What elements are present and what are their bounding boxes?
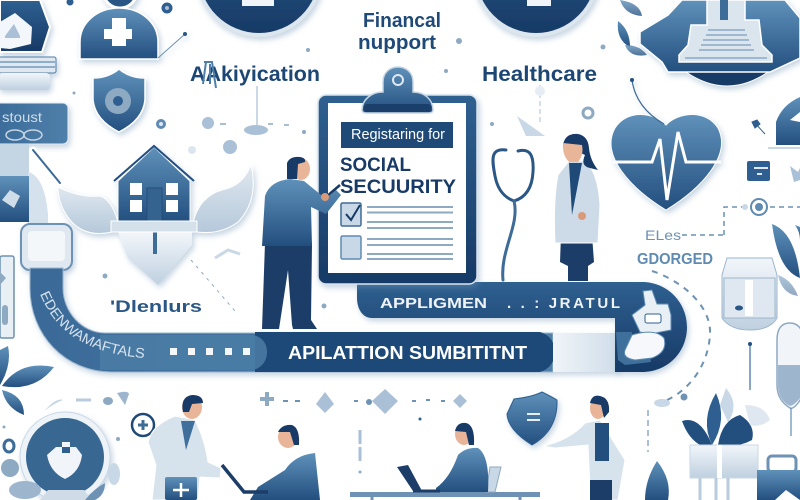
heading: financial support: Financal <box>363 10 441 32</box>
icon: connector blob <box>648 394 688 452</box>
band curved caption: EDENWAMAFTALS <box>40 290 144 358</box>
band squares <box>170 348 250 355</box>
icon: leaves near monument <box>618 0 647 56</box>
shield below house <box>118 232 192 285</box>
icon: house badge top left <box>0 0 56 90</box>
progress band: upper with end cap: . . : JRATUL <box>507 295 620 312</box>
body <box>436 448 488 492</box>
legs <box>262 243 317 329</box>
paper <box>328 103 466 273</box>
icon: circle badge bottom left <box>20 412 110 500</box>
label: gdorged: GDORGED <box>637 251 713 268</box>
icon: nurse bust with cross <box>80 0 187 59</box>
decorative sparks upper middle <box>188 86 289 154</box>
icon: shield held by doctor <box>507 392 557 445</box>
icon: bottom leaf <box>645 461 669 500</box>
icon: potted plant <box>682 388 770 500</box>
laptop <box>397 465 422 491</box>
laptop <box>222 465 268 492</box>
clipboard board <box>318 95 477 284</box>
table <box>350 492 540 497</box>
medical case <box>165 477 197 500</box>
label sign left <box>0 103 68 144</box>
head <box>455 423 473 445</box>
icon: monument in top-right badge <box>640 0 800 86</box>
clipboard: registering for social security: SECUURITY <box>340 177 456 198</box>
clip <box>362 67 433 113</box>
right wing <box>193 165 253 233</box>
icon: stethoscope <box>493 150 533 280</box>
coat <box>554 161 600 243</box>
figure: female doctor <box>554 134 600 281</box>
icon: jar <box>722 258 777 390</box>
form lines <box>367 207 453 259</box>
skirt and legs <box>560 235 594 281</box>
icon: briefcase <box>757 456 800 500</box>
decorative cross and dash bottom <box>260 392 300 406</box>
progress band: upper with end cap: APPLIGMEN <box>380 295 487 312</box>
icon: heart with heartbeat <box>611 78 722 210</box>
head <box>292 158 310 180</box>
label: dlenlurs: 'Dlenlurs <box>110 297 202 316</box>
head and hair <box>563 134 598 170</box>
decorative diamonds <box>316 389 467 474</box>
chair <box>486 467 501 492</box>
frame left side <box>0 256 14 338</box>
label sign left: stoust <box>2 109 42 125</box>
icon: device on band end <box>616 290 671 365</box>
decorative: small lamp near healthcare <box>517 85 545 136</box>
hand <box>578 212 586 220</box>
clipboard: registering for social security: Registaring for <box>351 126 445 143</box>
label: eligible: ELes <box>645 227 681 243</box>
icon: leaves top right <box>772 224 800 296</box>
clipboard: registering for social security <box>318 67 477 284</box>
left wing <box>58 187 118 234</box>
icon: cloud right edge <box>768 97 800 149</box>
heading: healthcare: Healthcare <box>482 63 597 86</box>
figure: man pointing at clipboard <box>262 157 341 329</box>
icon: small dots top <box>66 0 172 129</box>
icon: large circle top centre-left <box>195 0 323 37</box>
figure: person at desk with laptop <box>350 423 540 500</box>
figure: person with laptop <box>222 425 320 500</box>
heading: financial support: nupport <box>358 32 436 54</box>
empty box <box>341 236 361 259</box>
icon: shield with badge <box>93 69 145 132</box>
figure: doctor holding shield <box>543 396 625 500</box>
heading: financial support <box>358 10 441 54</box>
paper title: SOCIAL <box>340 155 411 176</box>
icon: capsule tube <box>777 323 800 436</box>
figure: doctor with medical case <box>132 395 221 500</box>
icon: small box and stars right <box>583 108 800 182</box>
decorative dashed line under house <box>191 250 240 311</box>
badge <box>132 414 154 436</box>
icon: large circle top centre-right <box>472 0 600 37</box>
coat <box>148 416 221 500</box>
icon: scroll and pin left <box>0 144 60 228</box>
dashed connector right <box>682 207 800 235</box>
decorative stars <box>2 38 606 441</box>
icon: target on connector <box>742 199 767 215</box>
icon: leaves left <box>0 346 54 415</box>
heading: application: AAkiyication <box>190 63 320 86</box>
paper heading band <box>341 122 453 148</box>
head <box>182 395 202 419</box>
dashed curve around band end <box>652 271 710 401</box>
icon: house with wings on shield <box>58 146 253 285</box>
band title: application submitted: APILATTION SUMBITITNT <box>288 343 527 363</box>
decorative plants bottom left <box>1 392 129 500</box>
progress band: lower <box>21 224 618 372</box>
torso and arm <box>262 179 341 246</box>
checked box <box>341 203 361 226</box>
progress band: upper with end cap <box>357 282 687 372</box>
pointer <box>326 185 340 197</box>
house <box>118 147 190 222</box>
